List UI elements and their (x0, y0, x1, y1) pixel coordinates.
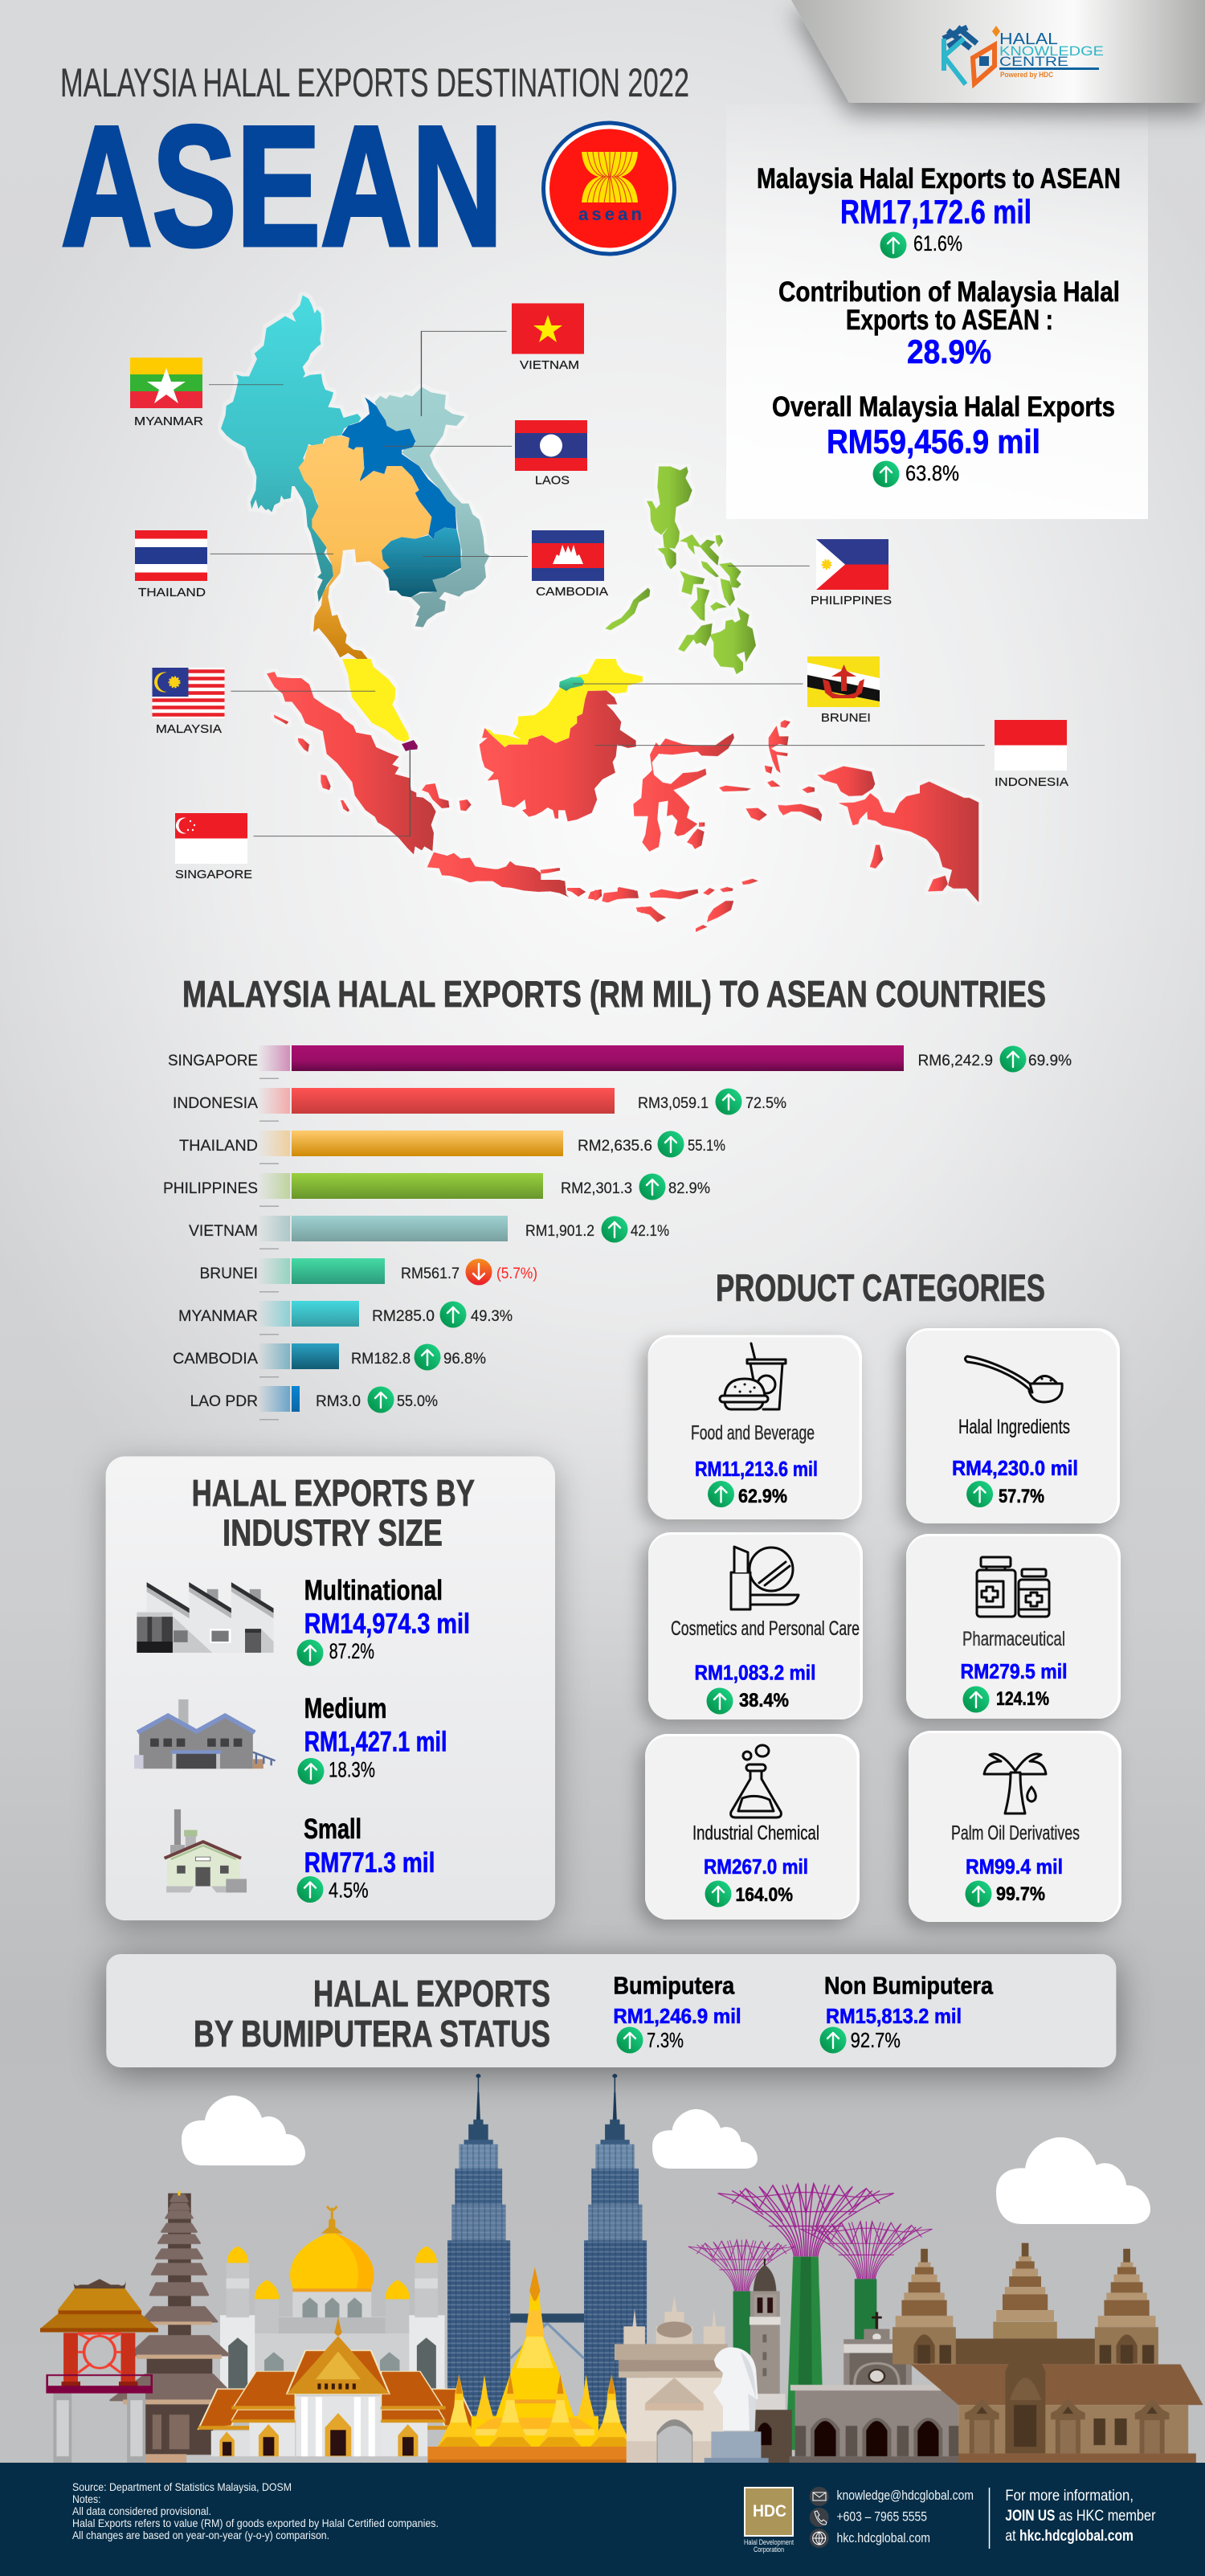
country: Indonesia east (594, 720, 978, 932)
bar row: Lao PDR (190, 1386, 438, 1421)
card: Industrial Chemical: 164.0% (736, 1884, 793, 1906)
country: Malaysia (342, 659, 643, 747)
label: small: 4.5% (329, 1878, 369, 1902)
bar row: Indonesia (173, 1088, 786, 1122)
label: small: Small (304, 1813, 362, 1845)
landmark: golden stupa (428, 2267, 649, 2463)
bar row: Lao PDR: RM3.0 (316, 1393, 361, 1410)
bar row: Myanmar: RM285.0 (372, 1308, 435, 1325)
country: Laos (341, 397, 456, 540)
logo: HDC: Corporation (754, 2545, 784, 2554)
call to action: as HKC member (1059, 2508, 1156, 2525)
bar row: Vietnam: VIETNAM (189, 1223, 258, 1240)
bar row: Singapore: 69.9% (1028, 1053, 1072, 1069)
stat: exports to ASEAN: Malaysia Halal Exports to ASEAN (757, 163, 1121, 194)
flag: Cambodia: CAMBODIA (536, 585, 608, 599)
icon: ASEAN emblem (541, 121, 676, 256)
bar row: Philippines (163, 1173, 710, 1207)
skyline: landmarks (40, 2074, 1203, 2463)
bar row: Lao PDR: 55.0% (397, 1393, 438, 1410)
source and notes (72, 2480, 439, 2541)
flag: Singapore: SINGAPORE (175, 868, 252, 881)
label: medium: 18.3% (329, 1758, 375, 1782)
flag: Cambodia (532, 530, 608, 599)
cloud: right (996, 2137, 1150, 2224)
flag: Singapore (175, 813, 252, 881)
label: medium (297, 1693, 447, 1785)
logo: Halal Knowledge Centre (943, 26, 1104, 84)
icon: multinational factory (137, 1582, 274, 1653)
stat: Non Bumiputera: 92.7% (851, 2028, 901, 2052)
flag: Vietnam: VIETNAM (520, 358, 579, 372)
landmark: red pavilion (40, 2279, 158, 2463)
country: Indonesia west (267, 672, 643, 914)
contact: phone (810, 2508, 927, 2527)
card: Food and Beverage: 62.9% (738, 1486, 787, 1507)
flag: Malaysia (153, 668, 225, 736)
flag: Myanmar (130, 358, 203, 428)
flag: Brunei: BRUNEI (821, 711, 871, 725)
stats panel: ASEAN exports (726, 104, 1148, 519)
call to action: hkc.hdcglobal.com (1019, 2528, 1134, 2545)
stat: contribution: Contribution of Malaysia Halal (778, 276, 1120, 308)
bar row: Vietnam: 42.1% (631, 1223, 669, 1240)
bar row: Myanmar (178, 1301, 513, 1335)
source and notes: All changes are based on year-on-year (y-o-y) comparison. (72, 2529, 329, 2541)
icon: spoon (966, 1356, 1062, 1402)
label: medium: Medium (304, 1693, 386, 1724)
heading: product categories: PRODUCT CATEGORIES (716, 1266, 1045, 1309)
flag: Indonesia (995, 720, 1068, 789)
card: Halal Ingredients: 57.7% (999, 1486, 1044, 1507)
logo: HDC: HDC (753, 2502, 786, 2521)
icon: small factory (165, 1809, 247, 1892)
label: multinational: Multinational (304, 1575, 443, 1606)
bar row: Thailand: THAILAND (179, 1138, 258, 1155)
card: Industrial Chemical (645, 1734, 860, 1920)
title: MALAYSIA HALAL EXPORTS DESTINATION 2022 (60, 60, 689, 105)
landmark: Angkor Wat (893, 2243, 1203, 2463)
card: Food and Beverage: RM11,213.6 mil (695, 1457, 818, 1481)
logo: Halal Knowledge Centre: Powered by HDC (1000, 71, 1053, 79)
landmark: cathedral (789, 2312, 964, 2463)
source and notes: Source: Department of Statistics Malaysia, DOSM (72, 2480, 292, 2493)
bar row: Cambodia: CAMBODIA (173, 1351, 258, 1368)
bar row: Brunei: RM561.7 (401, 1266, 460, 1282)
label: multinational: 87.2% (329, 1639, 374, 1663)
card: Palm Oil Derivatives (909, 1731, 1121, 1922)
landmark: Petronas Towers (447, 2074, 647, 2463)
country: Cambodia (382, 528, 461, 597)
stat: overall exports: 63.8% (905, 461, 959, 485)
icon: lipstick and compact (731, 1547, 799, 1609)
bar row: Lao PDR: LAO PDR (190, 1393, 258, 1410)
call to action: JOIN US (1005, 2508, 1055, 2525)
card: Pharmaceutical: 124.1% (996, 1688, 1049, 1710)
bar row: Indonesia: RM3,059.1 (638, 1095, 709, 1112)
source and notes: Halal Exports refers to value (RM) of goods exported by Halal Certified companies. (72, 2517, 439, 2529)
flag: Brunei (807, 656, 880, 725)
source and notes: All data considered provisional. (72, 2504, 211, 2517)
card: Palm Oil Derivatives: 99.7% (996, 1883, 1045, 1905)
bar row: Philippines: RM2,301.3 (561, 1180, 632, 1197)
bar row: Indonesia: INDONESIA (173, 1095, 258, 1112)
landmark: Merlion (705, 2347, 769, 2463)
card: Cosmetics and Personal Care (648, 1532, 863, 1719)
bar chart: exports by country (163, 1045, 1072, 1421)
card: Pharmaceutical (906, 1534, 1121, 1719)
icon: food and drink (720, 1343, 786, 1409)
stat: overall exports: Overall Malaysia Halal Exports (772, 391, 1115, 423)
heading: ASEAN: ASEAN (61, 91, 503, 282)
bar row: Thailand: 55.1% (688, 1138, 725, 1155)
bar row: Philippines: 82.9% (668, 1180, 710, 1197)
flag: Thailand (135, 530, 207, 599)
call to action (1005, 2488, 1156, 2545)
logo: HDC: Halal Development (744, 2538, 794, 2546)
card: Palm Oil Derivatives: RM99.4 mil (966, 1854, 1063, 1879)
cloud: middle (652, 2109, 758, 2169)
contact: website (810, 2529, 930, 2548)
card: Halal Ingredients (906, 1328, 1120, 1523)
stat: overall exports: RM59,456.9 mil (827, 423, 1040, 460)
stat: exports to ASEAN: 61.6% (913, 231, 962, 256)
call to action: For more information, (1005, 2488, 1134, 2504)
stat: Bumiputera: RM1,246.9 mil (613, 2004, 741, 2028)
logo plate: silver corner (791, 0, 1205, 103)
bar row: Myanmar: 49.3% (471, 1308, 513, 1325)
label: multinational (297, 1575, 470, 1666)
country: Vietnam (375, 387, 489, 628)
card: Food and Beverage (647, 1335, 862, 1519)
stat: Non Bumiputera (819, 1972, 994, 2054)
label: multinational: RM14,974.3 mil (304, 1608, 470, 1639)
logo: HDC (744, 2488, 794, 2554)
flag: Indonesia: INDONESIA (995, 775, 1068, 789)
card: Pharmaceutical: RM279.5 mil (961, 1659, 1067, 1683)
card: Palm Oil Derivatives: Palm Oil Derivatives (951, 1822, 1080, 1845)
stat: contribution: Exports to ASEAN : (846, 305, 1053, 336)
panel heading (192, 1472, 475, 1554)
landmark: clock tower (750, 2259, 792, 2463)
cloud: left (182, 2096, 305, 2165)
contact: email: knowledge@hdcglobal.com (837, 2488, 974, 2503)
bar row: Singapore: SINGAPORE (168, 1053, 258, 1069)
flag: Myanmar: MYANMAR (134, 415, 203, 428)
bar row: Vietnam (189, 1216, 669, 1249)
bar row: Indonesia: 72.5% (745, 1095, 786, 1112)
logo: Halal Knowledge Centre: KNOWLEDGE (999, 43, 1104, 59)
flag: Philippines: PHILIPPINES (811, 594, 892, 607)
bar row: Cambodia: 96.8% (443, 1351, 486, 1368)
logo: Halal Knowledge Centre: CENTRE (999, 54, 1068, 69)
flag: Laos: LAOS (535, 474, 570, 487)
leader lines (209, 331, 985, 836)
flag: Vietnam (512, 304, 584, 372)
card: Cosmetics and Personal Care: Cosmetics and Personal Care (671, 1617, 860, 1640)
contact: website: hkc.hdcglobal.com (837, 2530, 930, 2545)
card: Halal Ingredients: Halal Ingredients (958, 1416, 1070, 1438)
call to action: at (1005, 2528, 1016, 2545)
stat: Bumiputera (613, 1972, 741, 2054)
panel heading: BY BUMIPUTERA STATUS (194, 2013, 550, 2055)
flag: Laos (515, 420, 587, 487)
panel heading (194, 1973, 550, 2055)
stat: Bumiputera: Bumiputera (613, 1972, 735, 2000)
bar row: Singapore: RM6,242.9 (917, 1053, 993, 1069)
panel heading: INDUSTRY SIZE (223, 1512, 443, 1554)
bar row: Thailand (179, 1131, 725, 1164)
stat: overall exports (772, 391, 1115, 487)
label: small (297, 1813, 435, 1903)
landmark: Balinese pagoda (111, 2191, 238, 2463)
country: Brunei (559, 677, 584, 691)
source and notes: Notes: (72, 2492, 101, 2505)
country: Philippines (605, 467, 756, 674)
bar row: Cambodia (173, 1343, 486, 1377)
logo: Halal Knowledge Centre: HALAL (999, 31, 1058, 48)
panel heading: HALAL EXPORTS BY (192, 1472, 475, 1514)
stat: exports to ASEAN: RM17,172.6 mil (840, 193, 1031, 231)
bar row: Singapore (168, 1045, 1072, 1079)
label: small: RM771.3 mil (304, 1847, 435, 1879)
stat: Non Bumiputera: Non Bumiputera (824, 1972, 994, 2000)
icon: palm tree (984, 1754, 1046, 1813)
landmark: Supertrees (688, 2184, 932, 2450)
country: Singapore (402, 740, 418, 751)
contact: email (810, 2487, 974, 2506)
map: Southeast Asia (130, 295, 1068, 932)
card: Industrial Chemical: Industrial Chemical (692, 1822, 819, 1845)
panel heading: HALAL EXPORTS (313, 1973, 550, 2014)
stat: exports to ASEAN (757, 163, 1121, 259)
card: Cosmetics and Personal Care: 38.4% (739, 1690, 789, 1711)
card: Halal Ingredients: RM4,230.0 mil (952, 1456, 1078, 1480)
icon: ASEAN emblem: asean (578, 204, 642, 224)
flag: Philippines (811, 539, 892, 607)
card: Food and Beverage: Food and Beverage (691, 1422, 815, 1445)
card: Pharmaceutical: Pharmaceutical (962, 1628, 1065, 1650)
icon: medium factory (134, 1699, 276, 1768)
contact: phone: +603 – 7965 5555 (837, 2509, 927, 2525)
icon: medicine bottles (977, 1557, 1049, 1617)
stat: Bumiputera: 7.3% (647, 2028, 684, 2052)
stat: contribution: 28.9% (907, 333, 991, 370)
card: Industrial Chemical: RM267.0 mil (704, 1854, 808, 1879)
flag: Thailand: THAILAND (138, 586, 206, 599)
bar row: Brunei: (5.7%) (496, 1266, 537, 1282)
stat: Non Bumiputera: RM15,813.2 mil (826, 2004, 962, 2028)
bar row: Brunei: BRUNEI (199, 1266, 258, 1282)
flag: Malaysia: MALAYSIA (156, 722, 222, 736)
bar row: Vietnam: RM1,901.2 (525, 1223, 594, 1240)
country: Myanmar (221, 295, 361, 602)
landmark: Patuxai gate (615, 2296, 728, 2463)
bar row: Philippines: PHILIPPINES (163, 1180, 258, 1197)
bar row: Myanmar: MYANMAR (178, 1308, 258, 1325)
bar row: Cambodia: RM182.8 (351, 1351, 411, 1368)
landmark: mosque (220, 2206, 445, 2398)
stat: contribution (778, 276, 1120, 370)
card: Cosmetics and Personal Care: RM1,083.2 mil (694, 1660, 816, 1684)
panel: exports by Bumiputera status (106, 1954, 1116, 2067)
footer (0, 2463, 1205, 2576)
bar row: Brunei (199, 1258, 537, 1292)
bar row: Thailand: RM2,635.6 (578, 1138, 652, 1155)
country: Thailand (299, 436, 431, 669)
landmark: Thai temple (186, 2316, 478, 2463)
icon: flask (731, 1745, 781, 1818)
label: medium: RM1,427.1 mil (304, 1726, 447, 1758)
panel: exports by industry size (106, 1456, 555, 1920)
